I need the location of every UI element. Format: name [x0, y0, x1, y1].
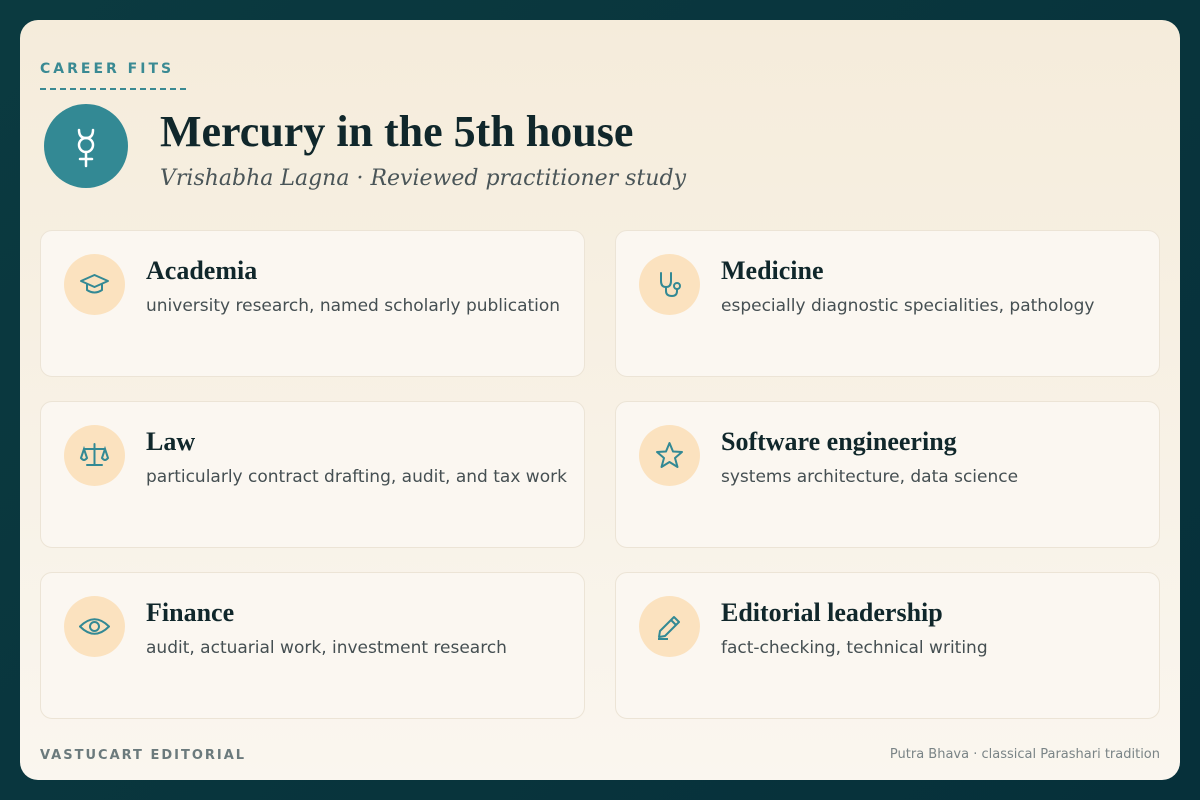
card: academia: [40, 230, 585, 377]
card: editorial leadership: [615, 572, 1160, 719]
icon: scales: [64, 425, 125, 486]
card: medicine: [615, 230, 1160, 377]
icon: pen: [639, 596, 700, 657]
card: academia: Academia: [146, 256, 257, 285]
subtitle: Vrishabha Lagna · Reviewed practitioner study: [160, 166, 686, 191]
card: medicine: Medicine: [721, 256, 824, 285]
footer: brand: VASTUCART EDITORIAL: [40, 748, 246, 763]
icon: graduation cap: [64, 254, 125, 315]
card: academia: university research, named scholarly publication: [146, 296, 560, 316]
card: editorial leadership: fact-checking, technical writing: [721, 638, 988, 658]
icon: eye: [64, 596, 125, 657]
card: law: Law: [146, 427, 195, 456]
card: finance: Finance: [146, 598, 234, 627]
card: law: [40, 401, 585, 548]
card: medicine: especially diagnostic specialities, pathology: [721, 296, 1094, 316]
card: law: particularly contract drafting, audit, and tax work: [146, 467, 567, 487]
card: finance: audit, actuarial work, investment research: [146, 638, 507, 658]
kicker: career fits: CAREER FITS: [40, 61, 174, 77]
card: finance: [40, 572, 585, 719]
card: software engineering: [615, 401, 1160, 548]
card: software engineering: systems architecture, data science: [721, 467, 1018, 487]
title: Mercury in the 5th house: [160, 107, 633, 156]
card: software engineering: Software engineering: [721, 427, 957, 456]
icon: star: [639, 425, 700, 486]
footer: source: Putra Bhava · classical Parashari tradition: [890, 747, 1160, 762]
card: editorial leadership: Editorial leadership: [721, 598, 943, 627]
icon: mercury symbol badge: [44, 104, 128, 188]
icon: stethoscope: [639, 254, 700, 315]
